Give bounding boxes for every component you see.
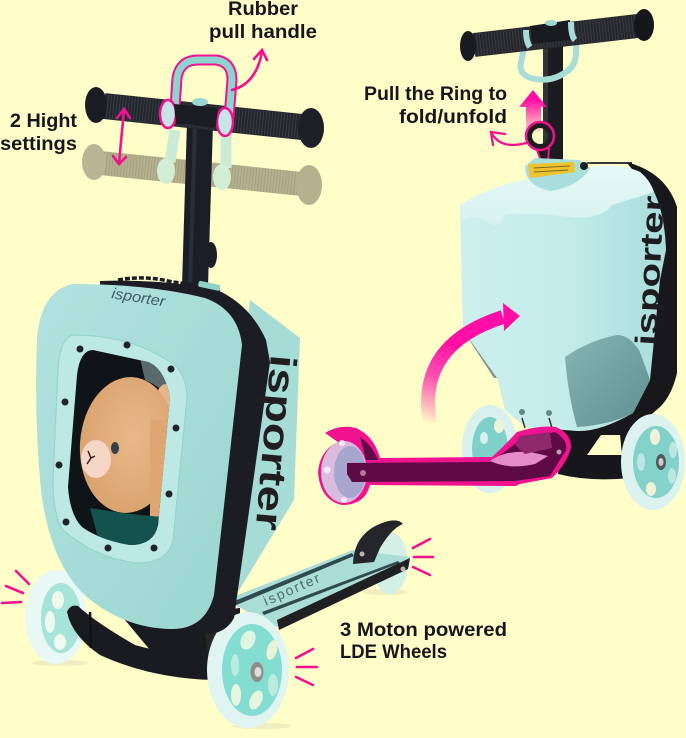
left scooter: back deck and rear wheel xyxy=(225,520,410,630)
right scooter: handlebar xyxy=(460,9,654,61)
arrow: height double arrow xyxy=(113,109,130,164)
left scooter: window screws xyxy=(56,342,180,552)
right scooter: case body xyxy=(460,165,666,431)
heading: rubber pull handle: pull handle xyxy=(209,22,317,43)
left scooter: side wedge of case xyxy=(225,300,300,592)
left scooter: black base frame xyxy=(67,606,240,680)
left scooter: front wheel xyxy=(207,612,292,729)
heading: pull the ring xyxy=(364,84,507,128)
left scooter: rear left wheel xyxy=(25,570,88,666)
right scooter: pull handle loop xyxy=(521,28,577,80)
arrow: pull up xyxy=(519,90,547,131)
arrow: fold curve xyxy=(428,303,520,423)
right scooter: black frame under case xyxy=(558,405,655,479)
heading: 2 height settings: 2 Hight xyxy=(10,111,78,132)
left scooter: window frame xyxy=(53,335,187,563)
heading: pull the ring: fold/unfold xyxy=(399,107,507,128)
right scooter: zipper rim xyxy=(590,162,677,435)
left scooter: isporter side logo: isporter xyxy=(248,353,304,532)
left scooter: fold knob xyxy=(205,242,217,268)
arrow: pull handle pointer xyxy=(232,50,267,90)
heading: 2 height settings: settings xyxy=(0,134,77,155)
heading: 2 height settings xyxy=(0,111,78,155)
left scooter: handlebar T clamp xyxy=(174,98,218,128)
left scooter: window with bear xyxy=(68,350,170,545)
heading: motor wheels: 3 Moton powered xyxy=(340,620,507,641)
left scooter: case front face xyxy=(36,284,242,629)
right scooter: highlighted folded deck xyxy=(318,427,571,505)
icon: glow ticks rear wheel xyxy=(413,539,433,575)
heading: motor wheels xyxy=(340,620,507,663)
right scooter: pole xyxy=(543,35,563,160)
heading: rubber pull handle xyxy=(209,0,317,43)
right scooter: isporter logo: isporter xyxy=(630,194,671,346)
heading: pull the ring: Pull the Ring to xyxy=(364,84,507,105)
icon: fold ring highlighted xyxy=(526,122,554,161)
left scooter: handlebar xyxy=(85,87,324,148)
icon: glow ticks left wheel xyxy=(2,571,29,603)
right scooter: top collar and yellow label xyxy=(525,158,632,191)
left scooter: telescopic pole xyxy=(182,122,213,286)
right scooter: right front wheel xyxy=(621,414,685,510)
heading: motor wheels: LDE Wheels xyxy=(340,642,447,663)
left scooter: case front face: isporter xyxy=(110,285,167,311)
left scooter: rubber pull handle highlighted xyxy=(160,60,233,136)
icon: glow ticks front wheel xyxy=(296,649,317,685)
arrow: ring pointer xyxy=(491,132,526,145)
left scooter: zipper rim xyxy=(100,278,270,634)
right scooter: middle back wheel xyxy=(462,405,518,493)
left scooter: back deck and rear wheel: isporter xyxy=(261,570,322,609)
left scooter: ghost handlebar lower position xyxy=(82,130,322,205)
